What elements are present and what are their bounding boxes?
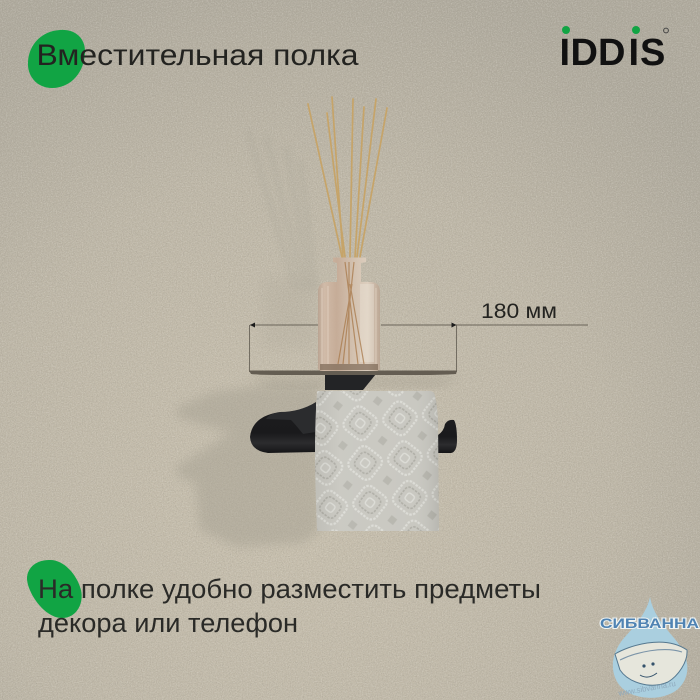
shelf bracket (325, 374, 376, 390)
IDDIS logo: IDDIS (560, 32, 665, 74)
green blob: description marker (27, 560, 82, 618)
holder bar, left (250, 402, 316, 453)
watermark: Sibvanna drop logo: www.sibvanna.ru (617, 679, 676, 698)
shelf (249, 370, 457, 375)
glass bottle (318, 258, 380, 371)
watermark: Sibvanna drop logo (600, 597, 699, 698)
description text: декора или телефон (38, 608, 298, 638)
green blob: heading marker (28, 30, 85, 88)
description text: На полке удобно разместить предметы (38, 574, 541, 604)
toilet paper roll (315, 391, 439, 531)
holder bar, right end (438, 420, 457, 453)
title: Вместительная полка (36, 39, 359, 72)
dimension label: 180 мм (481, 300, 557, 323)
dimension line: 180 mm (250, 300, 588, 372)
description text (38, 574, 541, 638)
reed sticks (308, 97, 387, 257)
watermark: Sibvanna drop logo: СИБВАННА (600, 615, 699, 631)
wall shadows (175, 130, 460, 547)
logo green dots (562, 26, 640, 34)
